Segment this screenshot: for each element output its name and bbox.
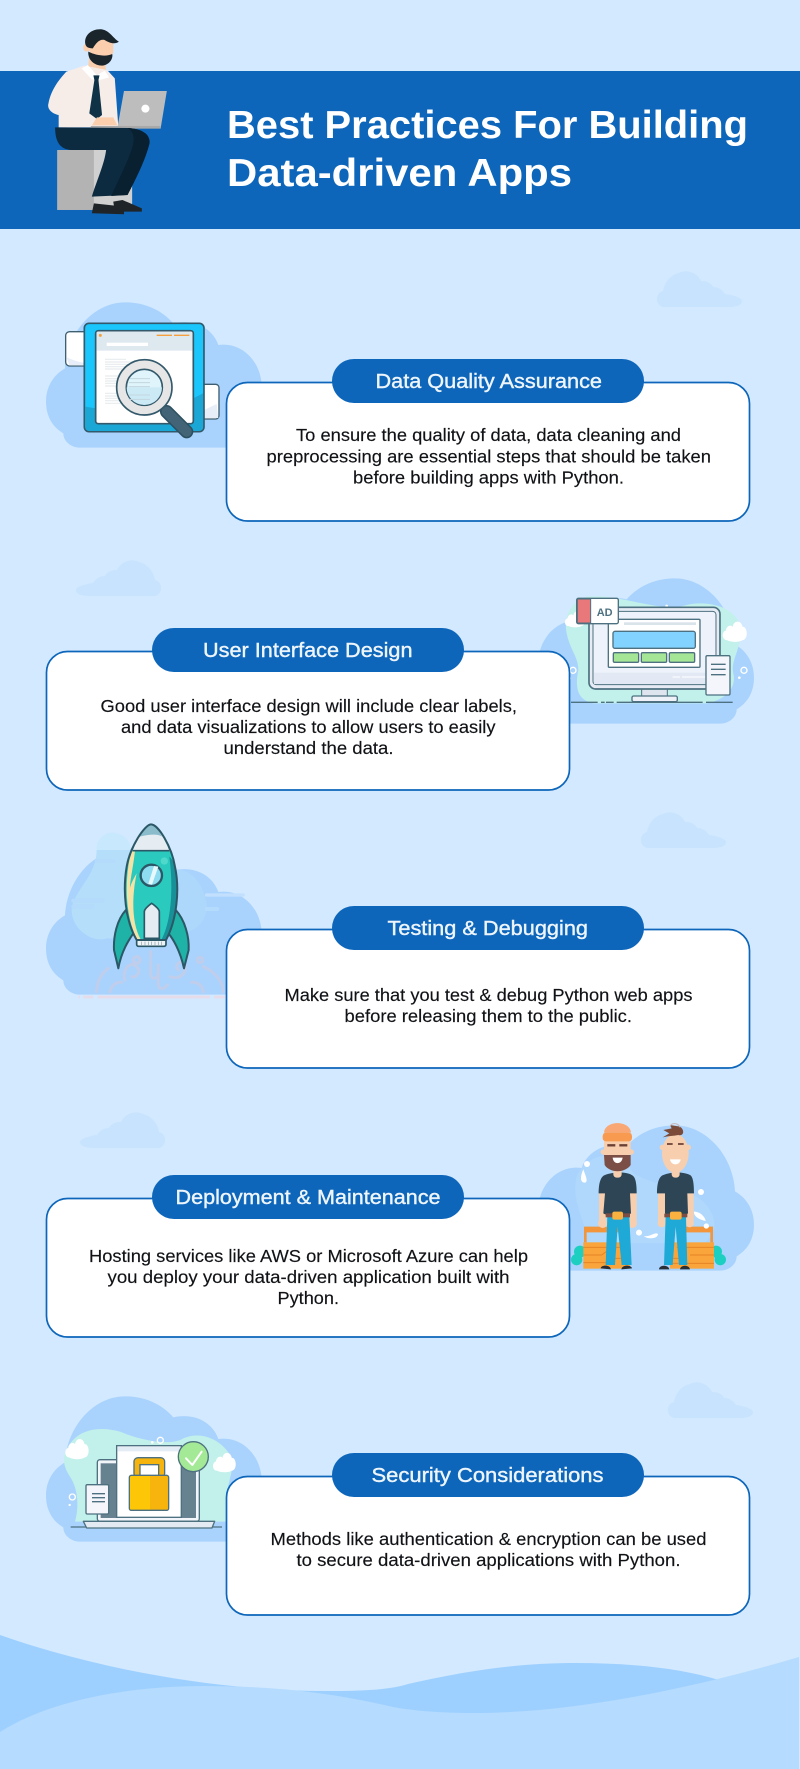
body text [89,1246,528,1308]
icon: two workers with toolboxes [571,1123,726,1269]
body text [284,985,693,1026]
body text: Methods like authentication & encryption can be used [270,1529,706,1549]
panel: testing and debugging illustration [46,824,262,997]
title [227,104,748,195]
pill heading: Deployment & Maintenance [176,1186,440,1209]
title: Data-driven Apps [227,152,572,195]
body text: Python. [278,1288,339,1308]
pill heading [332,906,644,950]
body text: Make sure that you test & debug Python web apps [284,985,693,1005]
pill heading [152,628,464,672]
body text: preprocessing are essential steps that should be taken [266,446,711,466]
body text: Good user interface design will include clear labels, [100,696,517,716]
pill heading: Testing & Debugging [388,917,588,940]
body text: To ensure the quality of data, data cleaning and [296,425,681,445]
pill heading: Data Quality Assurance [376,370,602,393]
body text [100,696,517,758]
pill heading: Security Considerations [372,1464,604,1487]
pill heading [332,1453,644,1497]
body text: Hosting services like AWS or Microsoft Azure can help [89,1246,528,1266]
title: Best Practices For Building [227,104,748,147]
icon: magnifier over document [66,323,219,432]
body text: understand the data. [224,738,394,758]
background clouds [76,271,753,1418]
icon: laptop with padlock [64,1429,236,1528]
body text: to secure data-driven applications with Python. [296,1550,680,1570]
body text: before releasing them to the public. [344,1006,632,1026]
panel: user interface design illustration [538,578,754,724]
pill heading [152,1175,464,1219]
icon: man with laptop [48,29,167,214]
pill heading: User Interface Design [203,639,412,662]
body text [266,425,711,488]
body text: you deploy your data-driven application built with [108,1267,510,1287]
body text: and data visualizations to allow users to easily [121,717,496,737]
panel: deployment and maintenance card [46,1175,570,1337]
body text [270,1529,706,1570]
panel: testing and debugging card [226,906,750,1068]
panel: security considerations card [226,1453,750,1615]
pill heading [332,359,644,403]
panel: deployment and maintenance illustration [538,1123,754,1271]
header band [0,71,800,229]
icon: monitor with ad: AD [597,607,613,619]
panel: user interface design card [46,628,570,790]
icon: rocket [72,824,243,997]
body text: before building apps with Python. [353,468,624,488]
icon: monitor with ad [565,596,747,703]
panel: data quality assurance card [226,359,750,521]
panel: security considerations illustration [46,1396,262,1542]
panel: data quality assurance illustration [46,302,262,448]
footer waves [0,1635,799,1769]
